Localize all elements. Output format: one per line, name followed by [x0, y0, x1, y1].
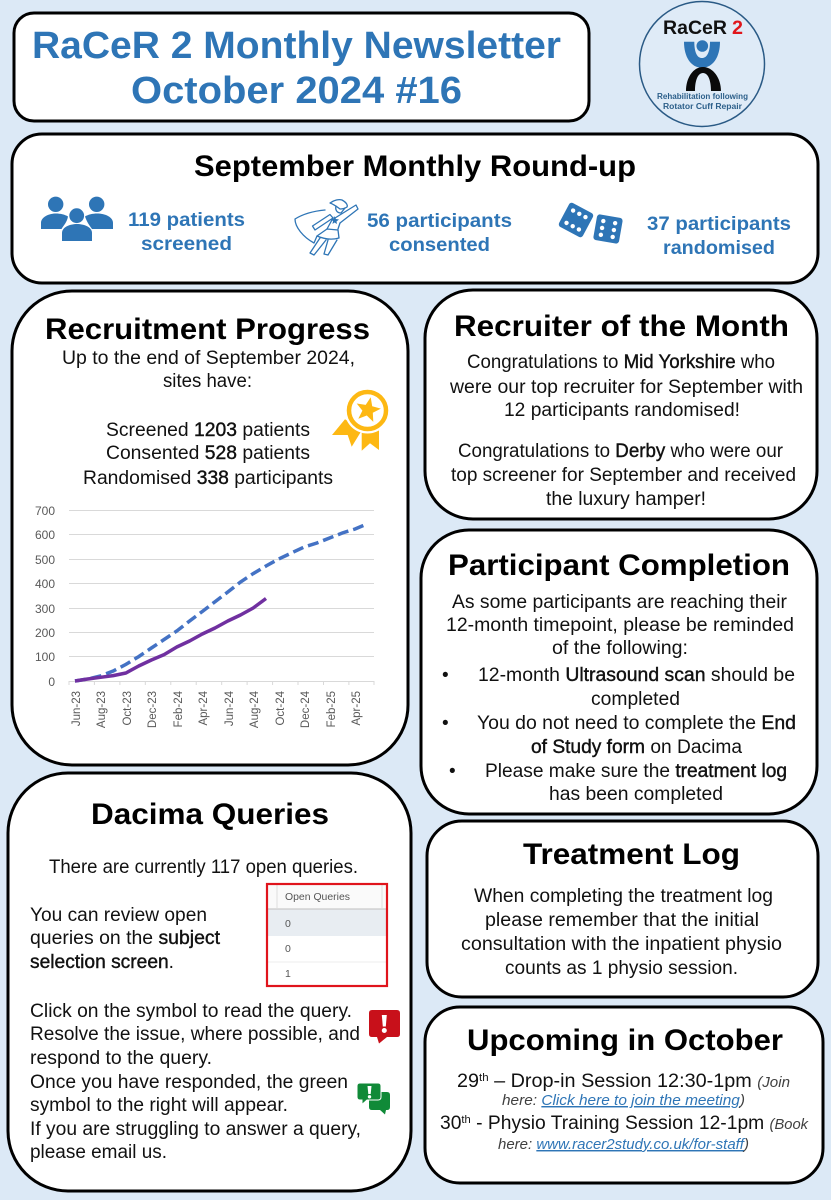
stat: participants consented: consented	[389, 235, 490, 256]
text: intro	[446, 592, 794, 659]
event: physio training session: (Book	[770, 1117, 809, 1133]
icon: medal	[332, 388, 390, 451]
stat: participants randomised	[647, 214, 791, 259]
panel: recruiter of the month	[425, 290, 817, 519]
event: physio training session: here: www.racer2study.co.uk/for-staff )	[498, 1137, 749, 1153]
text: treatment log reminder: counts as 1 physio session.	[505, 958, 738, 979]
text: top screener: the luxury hamper!	[546, 489, 706, 510]
screenshot: open queries table: Open Queries	[285, 891, 350, 903]
text: query instructions	[30, 1001, 361, 1163]
text: top screener	[451, 441, 796, 510]
heading: participant completion: Participant Completion	[448, 549, 790, 582]
text: query instructions: If you are struggling to answer a query,	[30, 1119, 361, 1140]
panel: September monthly round-up	[12, 134, 818, 283]
panel: participant completion	[421, 530, 817, 814]
heading: recruitment progress: Recruitment Progress	[45, 313, 370, 346]
screenshot: open queries table: 0	[285, 918, 291, 930]
line chart: Oct-23	[122, 691, 134, 726]
heading: treatment log: Treatment Log	[523, 838, 740, 871]
event: drop-in session: th	[479, 1072, 489, 1084]
screenshot: open queries table	[267, 884, 387, 986]
logo: RaCeR 2: RaCeR	[663, 18, 727, 39]
bullet: treatment log: Please make sure the treatment log	[485, 761, 787, 782]
panel: recruitment progress	[12, 291, 408, 765]
text: intro: 12-month timepoint, please be reminded	[446, 615, 794, 636]
line chart: Jun-24	[224, 690, 236, 726]
icon: green response symbol	[357, 1083, 390, 1114]
bullet: end of study form: of Study form on Dacima	[531, 737, 742, 758]
line chart: Apr-25	[351, 691, 363, 726]
text: query instructions: please email us.	[30, 1142, 167, 1163]
stat: participants randomised: 37 participants	[647, 214, 791, 235]
title	[32, 25, 561, 112]
text: review open queries: You can review open	[30, 905, 207, 926]
logo: RaCeR 2: Rotator Cuff Repair	[663, 102, 742, 111]
text: intro: As some participants are reaching their	[452, 592, 788, 613]
text: query instructions: Once you have responded, the green	[30, 1072, 348, 1093]
event: physio training session: - Physio Training Session 12-1pm	[471, 1113, 770, 1134]
line chart: Feb-24	[173, 690, 185, 727]
text: intro	[62, 348, 355, 392]
bullet: end of study form: •	[442, 713, 449, 734]
line chart: 600	[35, 528, 55, 542]
bullet: ultrasound scan: completed	[591, 689, 680, 710]
text: query instructions: Click on the symbol to read the query.	[30, 1001, 352, 1022]
screenshot: open queries table: 1	[285, 968, 291, 980]
text: totals	[83, 420, 333, 489]
text: open query count: There are currently 117 open queries.	[49, 857, 358, 878]
heading: upcoming in October: Upcoming in October	[467, 1024, 783, 1057]
panel: dacima queries	[8, 773, 411, 1191]
line chart: 100	[35, 650, 55, 664]
line chart: Dec-24	[300, 690, 312, 728]
text: intro: Up to the end of September 2024,	[62, 348, 355, 369]
text: intro: of the following:	[552, 638, 688, 659]
screenshot: open queries table: 0	[285, 943, 291, 955]
bullet: treatment log	[449, 761, 787, 805]
text: intro: sites have:	[163, 371, 252, 392]
title panel	[14, 13, 589, 121]
stat: participants randomised: randomised	[663, 238, 775, 259]
text: treatment log reminder: please remember that the initial	[485, 910, 759, 931]
event: drop-in session: – Drop-in Session 12:30-1pm	[489, 1071, 757, 1092]
line chart	[35, 504, 374, 728]
line chart: 0	[48, 675, 55, 689]
line chart: 700	[35, 504, 55, 518]
text: top recruiter: were our top recruiter for September with	[449, 377, 803, 398]
text: top screener: Congratulations to Derby who were our	[458, 441, 784, 462]
line chart: Dec-23	[147, 691, 159, 728]
bullet: treatment log: has been completed	[549, 784, 723, 805]
logo: RaCeR 2: Rehabilitation following	[657, 92, 748, 101]
icon: superhero	[295, 200, 358, 255]
line chart: Oct-24	[275, 690, 287, 726]
stat: patients screened: 119 patients	[128, 210, 245, 231]
event: physio training session: 30	[440, 1113, 461, 1134]
text: totals: Consented 528 patients	[106, 443, 310, 464]
stat: patients screened: screened	[141, 234, 232, 255]
line chart: 500	[35, 553, 55, 567]
text: treatment log reminder: consultation with the inpatient physio	[461, 934, 782, 955]
text: query instructions: Resolve the issue, where possible, and	[30, 1024, 360, 1045]
line chart: 400	[35, 577, 55, 591]
text: review open queries: queries on the subject	[30, 928, 221, 949]
text: query instructions: respond to the query.	[30, 1048, 212, 1069]
heading: dacima queries: Dacima Queries	[91, 798, 329, 831]
text: treatment log reminder	[461, 886, 782, 979]
line chart: Jun-23	[71, 691, 83, 726]
panel: treatment log	[427, 821, 818, 997]
text: top recruiter: 12 participants randomised!	[504, 400, 740, 421]
event: drop-in session: (Join	[757, 1075, 790, 1091]
heading: recruiter of the month: Recruiter of the Month	[454, 310, 789, 343]
bullet: treatment log: •	[449, 761, 456, 782]
title: October 2024 #16	[131, 70, 462, 112]
event: physio training session: th	[461, 1114, 471, 1126]
heading: round-up: September Monthly Round-up	[194, 150, 636, 183]
text: review open queries	[30, 905, 221, 973]
text: query instructions: symbol to the right will appear.	[30, 1095, 288, 1116]
bullet: ultrasound scan: 12-month Ultrasound scan should be	[478, 665, 795, 686]
stat: participants consented	[367, 211, 512, 256]
icon: red query symbol	[369, 1010, 400, 1044]
event: drop-in session	[457, 1071, 790, 1109]
icon: people	[41, 197, 113, 241]
text: top recruiter: Congratulations to Mid Yorkshire who	[467, 352, 775, 373]
stat: patients screened	[128, 210, 245, 255]
line chart: Aug-24	[249, 690, 261, 728]
panel: upcoming in October	[425, 1007, 823, 1183]
line chart: 300	[35, 602, 55, 616]
icon: dice	[558, 202, 623, 244]
logo: RaCeR 2	[640, 2, 764, 126]
line chart: Apr-24	[198, 690, 210, 726]
text: top screener: top screener for September and received	[451, 465, 796, 486]
bullet: end of study form: You do not need to complete the End	[477, 713, 796, 734]
logo: RaCeR 2: 2	[732, 18, 743, 39]
event: drop-in session: 29	[457, 1071, 478, 1092]
event: drop-in session: here: Click here to join the meeting )	[502, 1093, 745, 1109]
title: RaCeR 2 Monthly Newsletter	[32, 25, 561, 67]
text: totals: Randomised 338 participants	[83, 468, 333, 489]
text: totals: Screened 1203 patients	[106, 420, 310, 441]
line chart: Aug-23	[96, 691, 108, 728]
bullet: ultrasound scan: •	[442, 665, 449, 686]
event: physio training session	[440, 1113, 809, 1153]
bullet: end of study form	[442, 713, 796, 758]
text: top recruiter	[449, 352, 803, 421]
bullet: ultrasound scan	[442, 665, 795, 710]
text: treatment log reminder: When completing the treatment log	[474, 886, 773, 907]
line chart: 200	[35, 626, 55, 640]
stat: participants consented: 56 participants	[367, 211, 512, 232]
text: review open queries: selection screen.	[30, 952, 174, 973]
line chart: Feb-25	[326, 691, 338, 727]
